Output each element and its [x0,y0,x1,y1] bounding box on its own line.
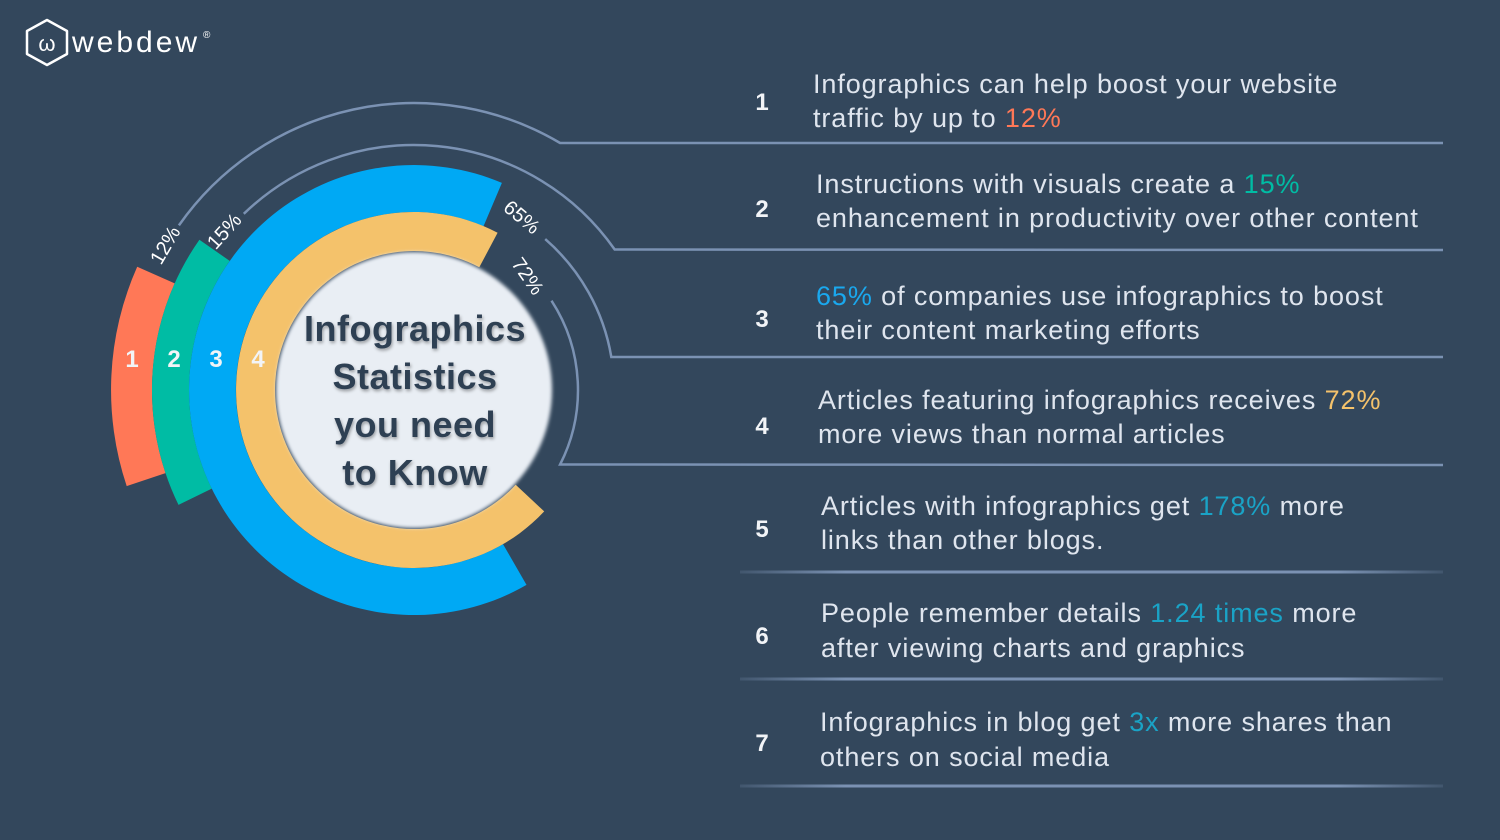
logo: webdew: webdew [71,26,200,59]
stat 6: after viewing charts and graphics [821,633,1245,663]
center title: Infographics [304,308,526,349]
ring: blue 65% [189,165,527,615]
ring numbers [125,346,265,373]
connector lines [179,103,1443,465]
stat 5 [755,491,1345,555]
stat 5: Articles with infographics get 178% more [821,491,1345,521]
stat 6: People remember details 1.24 times more [821,598,1357,628]
stat 1: 1 [755,89,769,116]
logo: webdew [27,20,211,65]
ring: red 12% [111,267,175,486]
logo: webdew: ® [203,30,211,41]
stat 4: more views than normal articles [818,419,1226,449]
logo: webdew: ω [38,31,56,56]
stat 2 [755,169,1419,233]
stat 4: 4 [755,413,769,440]
stat 4: Articles featuring infographics receives 72% [818,385,1381,415]
ring percentage labels: 72% [507,254,548,299]
ring percentage labels: 12% [146,222,186,268]
stat 4 [755,385,1381,449]
ring percentage labels: 65% [499,196,544,239]
center circle [276,252,552,528]
stat 5: 5 [755,516,769,543]
stat 1: traffic by up to 12% [813,103,1062,133]
center title: Statistics [332,356,498,397]
stat 1: Infographics can help boost your website [813,69,1338,99]
stat 3: 65% of companies use infographics to boost [816,281,1384,311]
ring numbers: 3 [209,346,223,373]
chart: radial rings [111,165,552,615]
stat 2: Instructions with visuals create a 15% [816,169,1300,199]
stat 7 [755,707,1392,772]
ring percentage labels [146,196,548,299]
ring percentage labels: 15% [203,209,246,254]
stat 2: enhancement in productivity over other content [816,203,1419,233]
ring: yellow 72% [236,212,544,568]
center title: you need [334,404,496,445]
stat list [755,69,1419,772]
stat 3 [755,281,1384,345]
stat 7: 7 [755,730,769,757]
stat 3: their content marketing efforts [816,315,1201,345]
stat 6: 6 [755,623,769,650]
stat 2: 2 [755,196,769,223]
stat 7: Infographics in blog get 3x more shares than [820,707,1392,737]
stat 3: 3 [755,306,769,333]
stat 6 [755,598,1357,663]
center title: to Know [342,452,488,493]
ring numbers: 1 [125,346,139,373]
center title [304,308,526,493]
ring numbers: 2 [167,346,181,373]
ring numbers: 4 [251,346,265,373]
dividers [740,570,1443,788]
stat 1 [755,69,1338,133]
stat 7: others on social media [820,742,1110,772]
ring: green 15% [152,240,230,505]
stat 5: links than other blogs. [821,525,1104,555]
